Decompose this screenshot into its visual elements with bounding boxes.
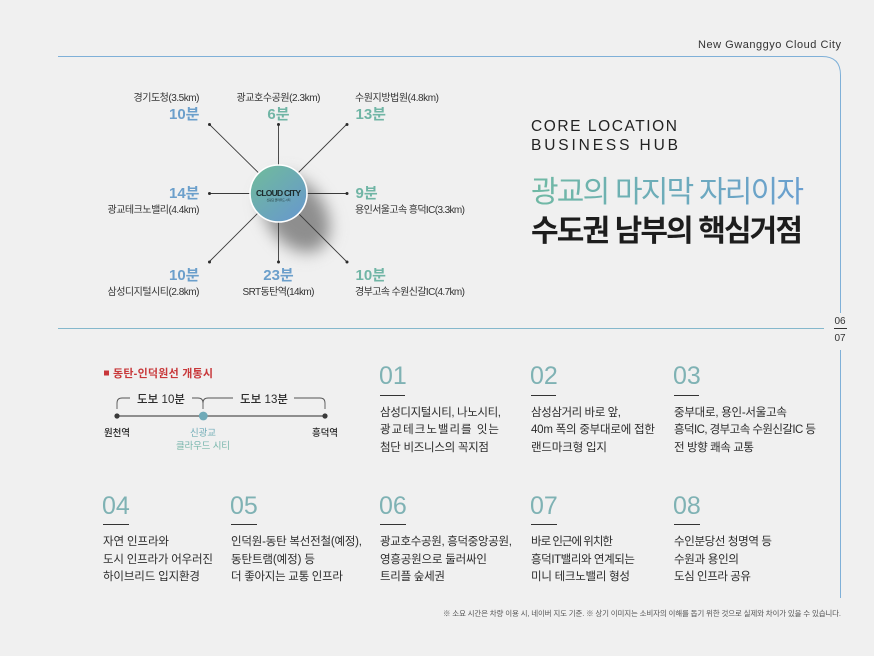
destination labels <box>108 91 465 298</box>
transit line diagram: 도보 13분 <box>240 393 288 406</box>
point 07: 흥덕IT밸리와 연계되는 <box>531 552 635 566</box>
central cloud city logo: 신광교 클라우드 시티 <box>266 197 291 202</box>
point 05: 인덕원-동탄 복선전철(예정), <box>231 534 362 548</box>
point 04: 자연 인프라와 <box>103 535 169 548</box>
destination labels: SRT동탄역(14km) <box>242 286 314 298</box>
destination labels: 10분 <box>169 267 200 284</box>
destination labels: 삼성디지털시티(2.8km) <box>108 286 200 298</box>
point 08: 08 <box>673 492 701 520</box>
page frame lines <box>58 56 840 598</box>
point 06: 영흥공원으로 둘러싸인 <box>380 552 487 566</box>
point 01: 01 <box>379 362 407 390</box>
point 04: 하이브리드 입지환경 <box>103 569 200 583</box>
point 06 <box>379 492 512 583</box>
main title: 수도권 남부의 핵심거점 <box>531 215 803 248</box>
point 01 <box>379 362 501 454</box>
station labels: 신광교 <box>190 427 216 439</box>
point 07 <box>530 492 635 583</box>
destination labels: 14분 <box>169 185 200 202</box>
point 02: 랜드마크형 입지 <box>531 441 607 454</box>
destination labels: 6분 <box>267 106 290 123</box>
station labels <box>104 427 338 452</box>
point 07: 07 <box>530 492 558 520</box>
central cloud city logo <box>250 165 307 222</box>
point 02: 02 <box>530 362 558 390</box>
point 05: 05 <box>230 492 258 520</box>
point 06: 06 <box>379 492 407 520</box>
point 03: 03 <box>673 362 701 390</box>
page number <box>834 316 847 344</box>
point 06: 광교호수공원, 흥덕중앙공원, <box>380 534 512 548</box>
point 03: 전 방향 쾌속 교통 <box>674 441 754 454</box>
point 04 <box>102 492 213 583</box>
circle shadow <box>248 163 344 265</box>
station labels: 클라우드 시티 <box>176 441 230 452</box>
line track and stations <box>114 412 328 420</box>
destination labels: 23분 <box>263 267 294 284</box>
point 06: 트리플 숲세권 <box>380 570 445 583</box>
central cloud city logo: CLOUD CITY <box>256 188 301 198</box>
point 08: 수원과 용인의 <box>674 552 739 566</box>
point 03 <box>673 362 816 454</box>
page number: 07 <box>834 333 846 344</box>
point 05: 더 좋아지는 교통 인프라 <box>231 570 343 583</box>
point 01: 삼성디지털시티, 나노시티, <box>380 405 501 419</box>
destination labels: 수원지방법원(4.8km) <box>355 92 439 104</box>
point 04: 도시 인프라가 어우러진 <box>103 553 213 566</box>
page number: 06 <box>834 316 846 327</box>
header brand text: New Gwanggyo Cloud City <box>698 39 842 51</box>
point 08: 도심 인프라 공유 <box>674 570 751 583</box>
point 08: 수인분당선 청명역 등 <box>674 535 772 548</box>
main title <box>531 176 804 248</box>
connector lines <box>209 124 347 262</box>
point 01: 첨단 비즈니스의 꼭지점 <box>380 441 489 454</box>
point 01: 광교테크노밸리를 잇는 <box>380 423 499 436</box>
destination labels: 10분 <box>169 106 200 123</box>
location diagram <box>108 91 465 298</box>
main title: 광교의 마지막 자리이자 <box>531 176 804 209</box>
destination labels: 광교호수공원(2.3km) <box>236 92 320 104</box>
destination labels: 경기도청(3.5km) <box>134 91 200 104</box>
point 05: 동탄트램(예정) 등 <box>231 553 315 566</box>
destination labels: 10분 <box>356 267 386 284</box>
point 02 <box>530 362 655 454</box>
point 07: 바로 인근에 위치한 <box>531 535 613 548</box>
station labels: 원천역 <box>104 427 130 439</box>
footnote: ※ 소요 시간은 차량 이용 시, 네이버 지도 기준. ※ 상기 이미지는 소비자의 이해를 돕기 위한 것으로 실제와 차이가 있을 수 있습니다. <box>443 608 841 618</box>
station labels: 흥덕역 <box>312 427 338 439</box>
point 03: 중부대로, 용인-서울고속 <box>674 406 787 419</box>
walking time labels: 도보 10분 <box>137 393 185 406</box>
point 05 <box>230 492 362 583</box>
destination labels: 9분 <box>356 185 378 202</box>
transit line diagram <box>104 366 338 452</box>
English heading <box>531 118 678 154</box>
point 08 <box>673 492 772 583</box>
walking time brackets <box>117 398 325 409</box>
destination labels: 광교테크노밸리(4.4km) <box>108 204 200 216</box>
English heading: BUSINESS HUB <box>531 137 678 154</box>
destination labels: 경부고속 수원신갈IC(4.7km) <box>355 285 465 298</box>
destination labels: 용인서울고속 흥덕IC(3.3km) <box>355 203 465 216</box>
English heading: CORE LOCATION <box>531 118 677 135</box>
point 03: 흥덕IC, 경부고속 수원신갈IC 등 <box>674 422 816 436</box>
destination labels: 13분 <box>356 106 386 123</box>
point 02: 삼성삼거리 바로 앞, <box>531 406 621 419</box>
point 07: 미니 테크노밸리 형성 <box>531 570 630 583</box>
point 02: 40m 폭의 중부대로에 접한 <box>531 423 655 436</box>
connector end dots <box>208 123 348 264</box>
section heading: 동탄-인덕원선 개통시 <box>113 366 213 380</box>
point 04: 04 <box>102 492 130 520</box>
